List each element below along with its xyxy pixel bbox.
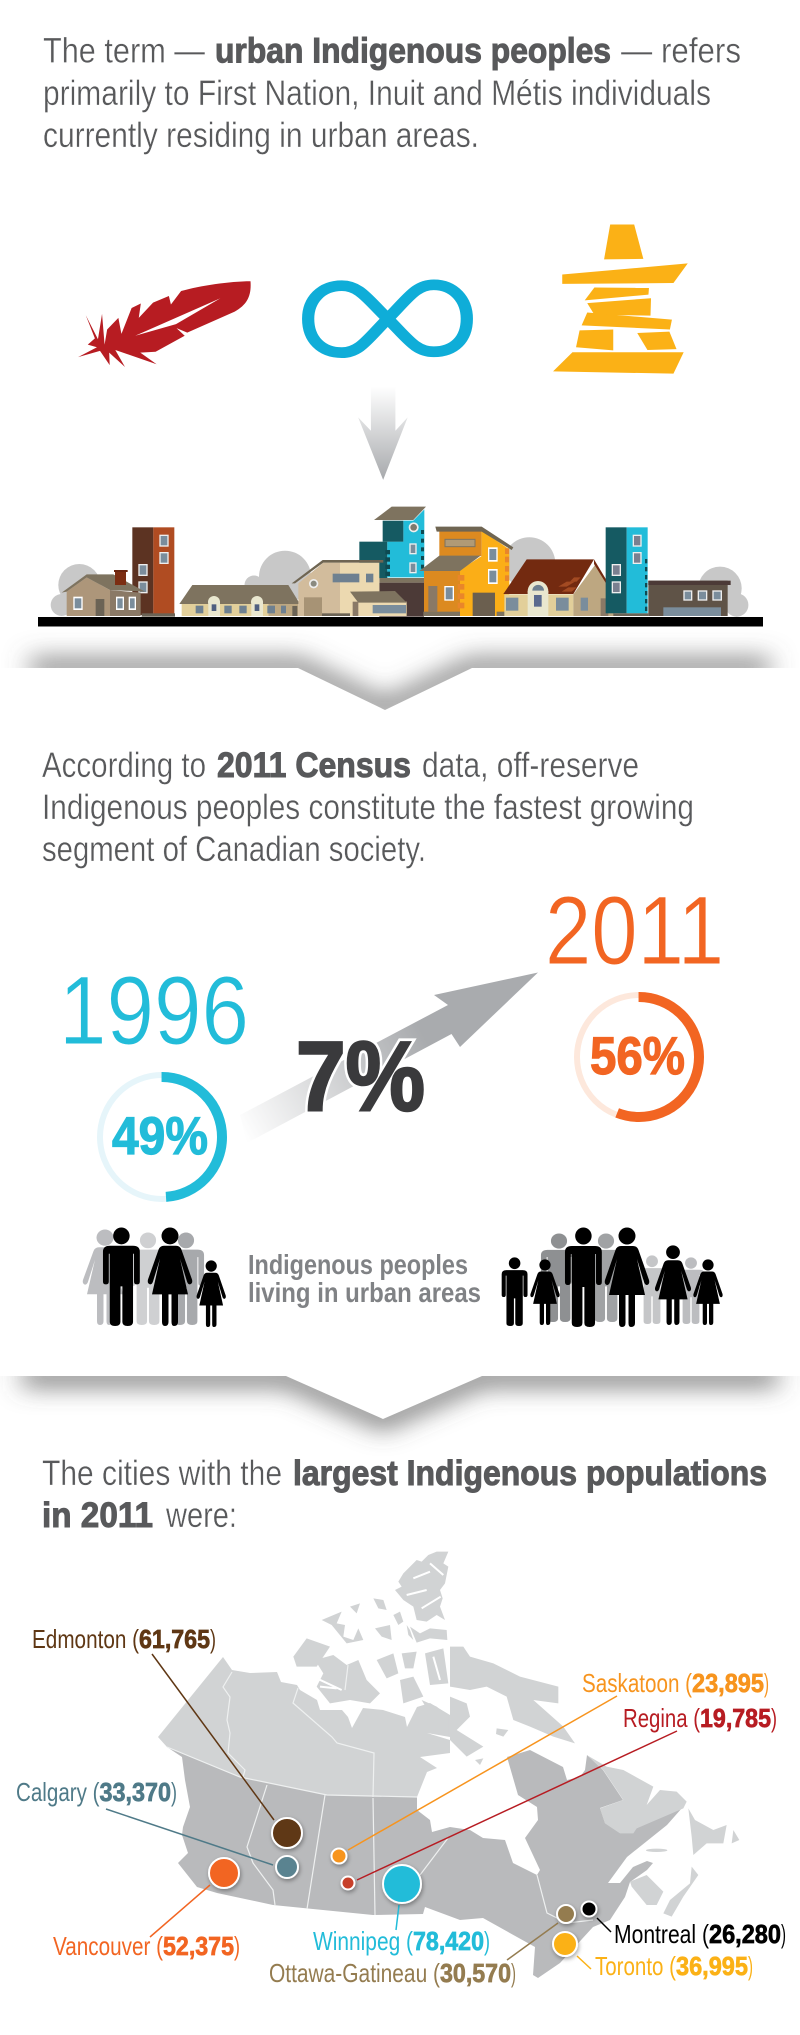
- callout: 7 percent increase: 7%: [296, 1021, 425, 1131]
- heading: 2011 census statement: [42, 745, 694, 869]
- heading: largest populations: The cities with the: [42, 1453, 282, 1493]
- heading: urban Indigenous peoples definition: [43, 30, 741, 155]
- heading: largest populations: were:: [165, 1495, 237, 1535]
- southern provinces: [167, 1747, 682, 1978]
- heading: 2011 census statement: Indigenous peoples constitute the fastest growing: [42, 787, 694, 827]
- ground line: [38, 617, 763, 626]
- icon: people group 1996: [83, 1227, 226, 1327]
- label: Montreal: 26,280: [709, 1919, 781, 1949]
- label: Ottawa-Gatineau: 30,570: [440, 1958, 511, 1988]
- donut chart: 49 percent: 49%: [112, 1107, 208, 1166]
- icon: yellow inukshuk: [553, 225, 688, 374]
- label: Ottawa-Gatineau: Ottawa-Gatineau (: [269, 1958, 440, 1988]
- label: Edmonton: ): [210, 1624, 216, 1654]
- label: Montreal: ): [781, 1919, 786, 1949]
- heading: urban Indigenous peoples definition: The term —: [43, 30, 205, 70]
- callout: 7 percent increase: 7%: [296, 1021, 425, 1131]
- fjord cuts: [317, 1563, 443, 1690]
- year label 2011: 2011: [545, 876, 724, 985]
- label: Edmonton: 61,765: [139, 1624, 210, 1654]
- arrow: down to city: [358, 387, 408, 480]
- province borders: [167, 1665, 593, 1923]
- legend text: [248, 1249, 481, 1308]
- illustration: city skyline: [38, 507, 763, 626]
- heading: largest populations: in 2011: [42, 1495, 153, 1535]
- label: Toronto: [595, 1951, 753, 1981]
- label: Winnipeg: ): [484, 1926, 490, 1956]
- buildings left half: [62, 527, 407, 617]
- heading: 2011 census statement: data, off-reserve: [422, 745, 639, 785]
- label: Vancouver: Vancouver (: [53, 1931, 163, 1961]
- buildings right half: [359, 507, 731, 617]
- label: Regina: Regina (: [623, 1703, 700, 1733]
- label: Saskatoon: 23,895: [692, 1668, 764, 1698]
- heading: urban Indigenous peoples definition: currently residing in urban areas.: [43, 115, 479, 155]
- label: Saskatoon: ): [764, 1668, 769, 1698]
- label: Regina: [623, 1703, 777, 1733]
- leader lines: [106, 1654, 677, 1969]
- label: Montreal: Montreal (: [614, 1919, 709, 1949]
- label: Toronto: ): [748, 1951, 753, 1981]
- label: Calgary: [16, 1777, 177, 1807]
- clouds behind city: [51, 537, 748, 617]
- label: Toronto: Toronto (: [595, 1951, 676, 1981]
- label: Winnipeg: Winnipeg (: [313, 1926, 413, 1956]
- label: Ottawa-Gatineau: ): [511, 1958, 516, 1988]
- map of Canada: [106, 1552, 739, 1978]
- heading: largest populations: [42, 1453, 767, 1535]
- legend text: Indigenous peoples: [248, 1249, 468, 1280]
- heading: 2011 census statement: segment of Canadian society.: [42, 829, 426, 869]
- label: Toronto: 36,995: [676, 1951, 748, 1981]
- donut chart: 56 percent: [577, 995, 701, 1119]
- city markers: [209, 1818, 596, 1956]
- label: Saskatoon: Saskatoon (: [582, 1668, 692, 1698]
- label: Vancouver: ): [234, 1931, 240, 1961]
- icon: red feather: [78, 281, 251, 367]
- heading: urban Indigenous peoples definition: urban Indigenous peoples: [215, 30, 611, 70]
- label: Edmonton: Edmonton (: [32, 1624, 139, 1654]
- label: Calgary: 33,370: [100, 1777, 171, 1807]
- label: Vancouver: 52,375: [163, 1931, 234, 1961]
- label: Regina: ): [771, 1703, 777, 1733]
- donut chart: 56 percent: 56%: [590, 1027, 685, 1086]
- label: Winnipeg: 78,420: [413, 1926, 484, 1956]
- atlantic and Labrador land: [587, 1755, 739, 1917]
- northern territories: [158, 1657, 450, 1797]
- year label 1996: 1996: [59, 956, 249, 1065]
- label: Calgary: ): [171, 1777, 177, 1807]
- heading: 2011 census statement: According to: [42, 745, 206, 785]
- divider: shaded pointer one: [30, 668, 770, 710]
- legend text: living in urban areas: [248, 1277, 481, 1308]
- arctic islands east: [450, 1647, 575, 1765]
- icon: people group 2011: [502, 1228, 723, 1327]
- label: Montreal: [614, 1919, 786, 1949]
- donut chart: 49 percent: [100, 1075, 224, 1199]
- arctic islands west: [293, 1552, 448, 1737]
- icon: blue infinity symbol: [308, 285, 467, 353]
- heading: urban Indigenous peoples definition: — refers: [621, 30, 741, 70]
- arrow: rising trend: [240, 972, 538, 1143]
- divider: shaded pointer two: [22, 1376, 778, 1419]
- label: Regina: 19,785: [700, 1703, 771, 1733]
- label: Calgary: Calgary (: [16, 1777, 100, 1807]
- heading: 2011 census statement: 2011 Census: [217, 745, 411, 785]
